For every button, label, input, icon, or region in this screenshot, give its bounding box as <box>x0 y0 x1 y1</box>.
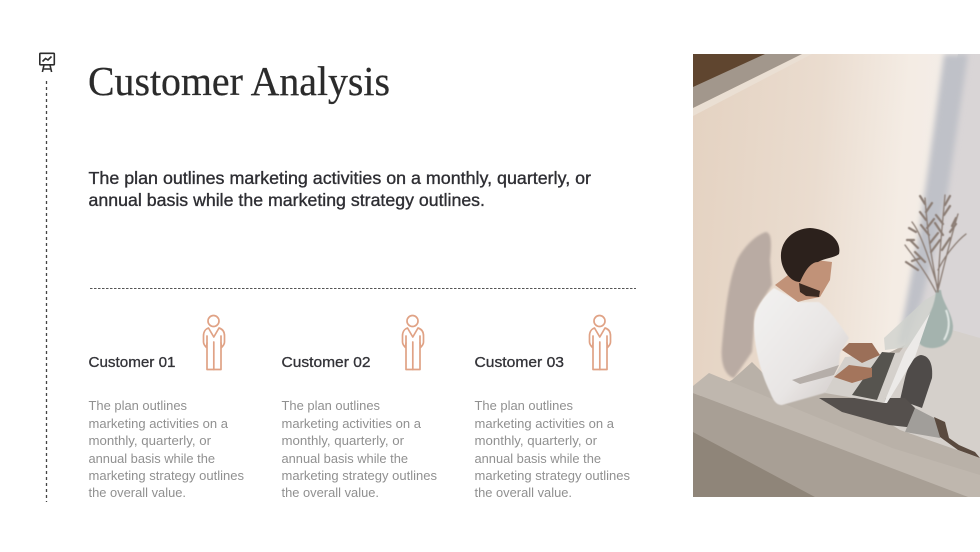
photo: man with laptop on steps <box>693 54 980 497</box>
heading: customer 01: Customer 01 <box>88 354 176 371</box>
description: customer 01: The plan outlines <box>88 399 187 413</box>
torso shadow <box>792 365 839 384</box>
customer 02 column <box>282 316 437 500</box>
wall <box>693 54 958 396</box>
vase <box>918 290 953 348</box>
raised leg <box>900 355 932 408</box>
steps <box>693 373 730 396</box>
description: customer 03: the overall value. <box>474 486 572 500</box>
hands <box>842 343 880 363</box>
customer 01 column <box>88 316 244 500</box>
description: customer 03: The plan outlines <box>474 399 573 413</box>
icon: person 02 <box>402 316 424 370</box>
description: customer 03: marketing strategy outlines <box>474 469 630 483</box>
dried plant <box>905 195 966 292</box>
vertical dashed timeline <box>46 81 48 502</box>
floor right <box>886 330 980 458</box>
heading: customer 03: Customer 03 <box>474 354 564 371</box>
shin <box>905 408 942 438</box>
neck and face <box>775 258 832 302</box>
description: customer 02: marketing strategy outlines <box>282 469 437 483</box>
title: Customer Analysis <box>88 58 390 104</box>
description: customer 02: The plan outlines <box>282 399 380 413</box>
sweater <box>754 288 849 405</box>
glass reflection of vase <box>884 307 918 350</box>
description: customer 02: monthly, quarterly, or <box>282 434 404 448</box>
lower leg <box>819 398 915 428</box>
icon: presentation board <box>40 53 54 72</box>
customer 03 column <box>474 316 630 500</box>
description: customer 01: marketing activities on a <box>88 417 228 431</box>
man shadow on wall <box>722 232 772 378</box>
description: customer 02: annual basis while the <box>282 452 408 466</box>
horizontal dashed divider <box>90 288 636 290</box>
description: customer 01: the overall value. <box>88 486 186 500</box>
icon: person 01 <box>204 316 224 370</box>
description: customer 03: monthly, quarterly, or <box>474 434 597 448</box>
description: customer 01: annual basis while the <box>88 452 215 466</box>
description: customer 03 <box>474 399 630 500</box>
description: customer 02 <box>282 399 437 500</box>
beard <box>799 283 820 297</box>
hair <box>781 228 839 282</box>
shadow band on wall corner <box>898 54 968 345</box>
lead paragraph: The plan outlines marketing activities on a monthly, quarterly, or <box>88 168 591 188</box>
laptop <box>825 313 930 403</box>
description: customer 01: monthly, quarterly, or <box>88 434 211 448</box>
description: customer 01: marketing strategy outlines <box>88 469 244 483</box>
lead paragraph: annual basis while the marketing strategy outlines. <box>88 190 485 210</box>
description: customer 03: annual basis while the <box>474 452 601 466</box>
description: customer 03: marketing activities on a <box>474 417 614 431</box>
description: customer 01 <box>88 399 244 500</box>
lead paragraph <box>88 168 591 210</box>
heading: customer 02: Customer 02 <box>282 354 370 371</box>
right side wall <box>918 54 980 338</box>
foot <box>934 417 980 458</box>
description: customer 02: marketing activities on a <box>282 417 421 431</box>
floor base <box>693 338 980 497</box>
description: customer 02: the overall value. <box>282 486 379 500</box>
ceiling beam <box>693 63 784 116</box>
icon: person 03 <box>590 316 610 370</box>
